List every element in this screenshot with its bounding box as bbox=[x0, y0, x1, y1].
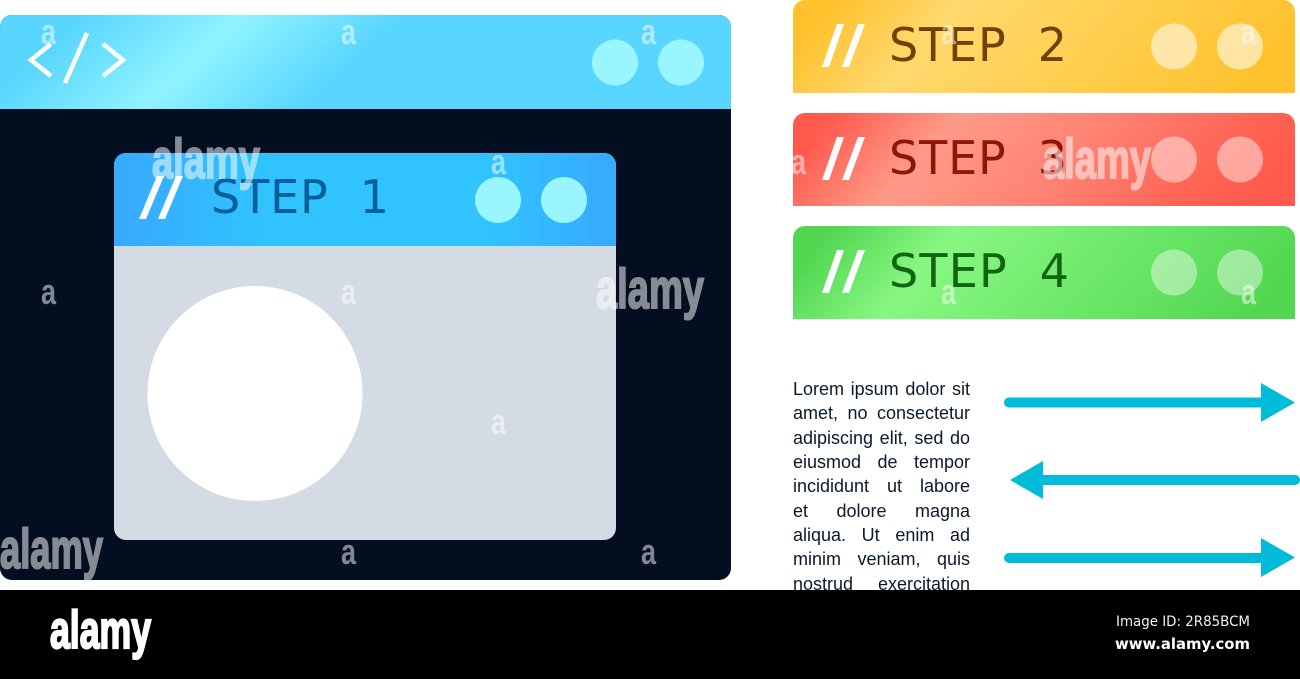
panel: outer browser window bbox=[0, 15, 731, 580]
text block: lorem ipsum: incididunt ut labore bbox=[793, 476, 970, 496]
watermarks: small: a bbox=[341, 271, 357, 312]
icon: step 4 slashes bbox=[822, 250, 865, 293]
arrow: left, middle bbox=[1010, 461, 1300, 499]
footer bar bbox=[0, 590, 1300, 679]
white circle placeholder bbox=[148, 286, 362, 501]
step 1 control dots bbox=[475, 177, 587, 223]
step 3 control dots bbox=[1151, 136, 1263, 182]
panel: step 2 bar bbox=[793, 0, 1295, 93]
watermarks: small bbox=[41, 11, 1257, 572]
panel: step 4 bar bbox=[793, 226, 1295, 319]
heading: step 2: STEP 2 bbox=[889, 18, 1067, 72]
watermarks: small: a bbox=[491, 401, 507, 442]
step 1 header bar bbox=[114, 153, 616, 246]
icon: step 1 slashes bbox=[139, 176, 183, 219]
icon: code brackets bbox=[31, 33, 123, 83]
step 2 control dots bbox=[1151, 24, 1263, 70]
watermarks: small: a bbox=[41, 11, 57, 52]
text block: lorem ipsum: Lorem ipsum dolor sit bbox=[793, 379, 970, 399]
watermarks: small: a bbox=[41, 271, 57, 312]
outer window header bar bbox=[0, 15, 731, 109]
watermarks: small: a bbox=[641, 11, 657, 52]
heading: step 4: STEP 4 bbox=[889, 244, 1069, 298]
watermarks: small: a bbox=[341, 531, 357, 572]
website: www.alamy.com bbox=[1115, 635, 1250, 653]
footer logo: alamy bbox=[50, 601, 151, 660]
step 4 control dots bbox=[1151, 250, 1263, 296]
watermarks: small: a bbox=[941, 11, 957, 52]
text block: lorem ipsum: minim veniam, quis bbox=[793, 549, 970, 569]
text block: lorem ipsum: eiusmod de tempor bbox=[793, 452, 970, 472]
arrow: right, bottom bbox=[1004, 538, 1295, 577]
watermarks: small: a bbox=[491, 141, 507, 182]
text block: lorem ipsum: et dolore magna bbox=[793, 501, 970, 521]
text block: lorem ipsum: amet, no consectetur bbox=[793, 403, 970, 423]
image id: Image ID: 2R85BCM bbox=[1116, 614, 1250, 630]
text block: lorem ipsum bbox=[793, 379, 970, 590]
watermarks: large: alamy bbox=[0, 517, 103, 580]
panel: step 1 window bbox=[114, 153, 616, 540]
heading: step 1: STEP 1 bbox=[211, 170, 389, 224]
watermarks: small: a bbox=[1241, 271, 1257, 312]
heading: step 3: STEP 3 bbox=[889, 131, 1067, 185]
icon: step 2 slashes bbox=[822, 24, 865, 67]
watermarks: large: alamy bbox=[596, 257, 704, 320]
text block: lorem ipsum: adipiscing elit, sed do bbox=[793, 428, 970, 448]
watermarks: large bbox=[0, 127, 1151, 580]
watermarks: large: alamy bbox=[152, 127, 260, 190]
panel: step 3 bar bbox=[793, 113, 1295, 206]
watermarks: large: alamy bbox=[1043, 127, 1151, 190]
watermarks: small: a bbox=[641, 531, 657, 572]
watermarks: small: a bbox=[1241, 11, 1257, 52]
icon: step 3 slashes bbox=[822, 137, 865, 180]
text block: lorem ipsum: aliqua. Ut enim ad bbox=[793, 525, 970, 545]
watermarks: small: a bbox=[791, 141, 807, 182]
watermarks: small: a bbox=[341, 11, 357, 52]
watermarks: small: a bbox=[941, 271, 957, 312]
arrow: right, top bbox=[1004, 383, 1295, 422]
outer window control dots bbox=[592, 40, 704, 86]
